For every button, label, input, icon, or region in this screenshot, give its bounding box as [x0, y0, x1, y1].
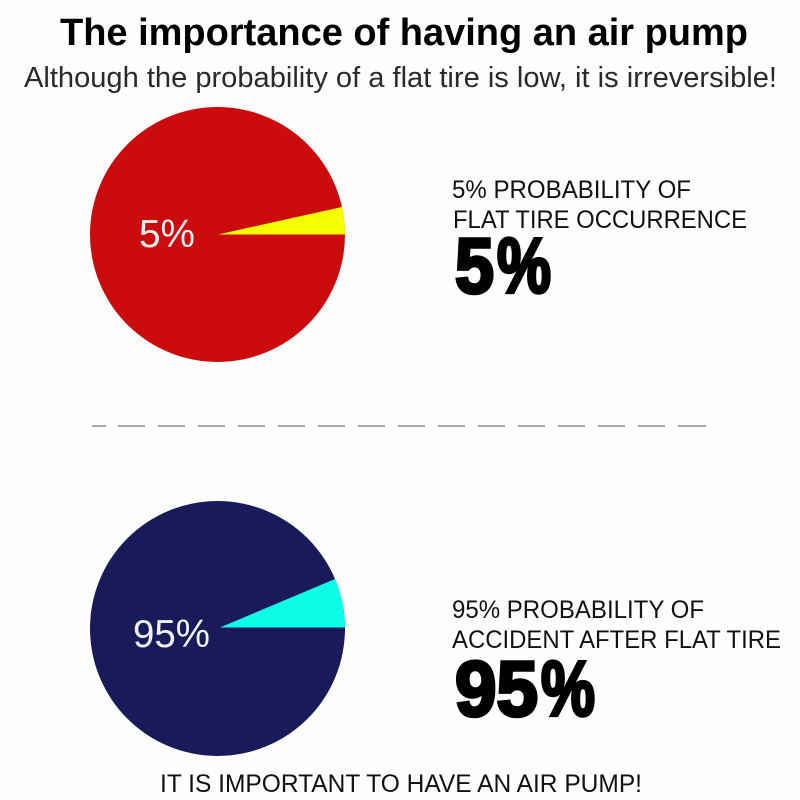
pie chart: 95% accident — [90, 501, 345, 756]
subtitle: Although the probability of a flat tire is low, it is irreversible! — [24, 62, 777, 94]
text block: accident probability: 95% PROBABILITY OF — [452, 596, 704, 624]
text block: accident probability — [452, 596, 781, 732]
text block: flat tire probability: 5% PROBABILITY OF — [452, 176, 691, 204]
divider: dashed line — [92, 425, 706, 427]
big number: 95%: 95 — [455, 644, 538, 732]
pie chart: 5% flat tire — [90, 107, 345, 362]
big number: 5%: 5 — [455, 222, 494, 310]
big number: 95% — [455, 644, 595, 732]
footer message: IT IS IMPORTANT TO HAVE AN AIR PUMP! — [160, 770, 642, 798]
pie label: 5%: 5% — [139, 213, 195, 256]
text block: accident probability: ACCIDENT AFTER FLAT TIRE — [452, 626, 781, 654]
pie label: 95%: 95% — [133, 613, 210, 656]
pie slice: 5% — [218, 207, 345, 234]
big number: 5% — [455, 222, 551, 310]
pie slice: 95% — [220, 579, 345, 628]
text block: flat tire probability: FLAT TIRE OCCURRENCE — [453, 206, 747, 234]
text block: flat tire probability — [452, 176, 747, 310]
big number: 5%: % — [497, 222, 551, 310]
title: The importance of having an air pump — [60, 12, 748, 54]
big number: 95%: % — [541, 644, 595, 732]
